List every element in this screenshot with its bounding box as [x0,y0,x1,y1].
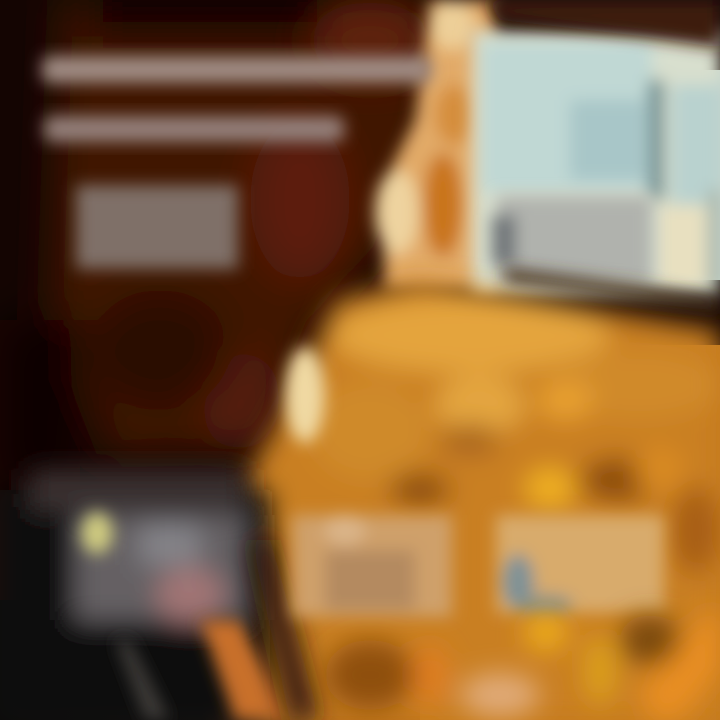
title: heading line 1 [42,56,432,83]
panel: bottom-left dark card [0,470,270,720]
background: bright wall column [375,0,495,290]
highlight: cream glow [285,347,325,443]
panel: window text card [492,196,652,284]
dark band under window [505,268,720,310]
dark stripes bottom-left [115,640,170,720]
background: bottom base band [0,600,720,720]
dark diagonal stripe [250,540,320,720]
background: upper right brown [310,2,430,78]
panel: right tan card [496,515,664,615]
title: heading line 2 [44,116,344,142]
background: window base under right edge [540,70,720,280]
orange stripe bottom-left [200,620,290,720]
background: field base under right edge [420,345,720,720]
window [472,30,720,295]
icon: yellow dot [81,512,113,554]
golden accents along the bottom [325,610,720,720]
top right dark ceiling [485,0,720,48]
background: golden field [245,280,720,720]
text block: intro card [76,185,238,269]
background: dark scene [0,0,440,490]
panel: centre tan card [292,514,452,617]
